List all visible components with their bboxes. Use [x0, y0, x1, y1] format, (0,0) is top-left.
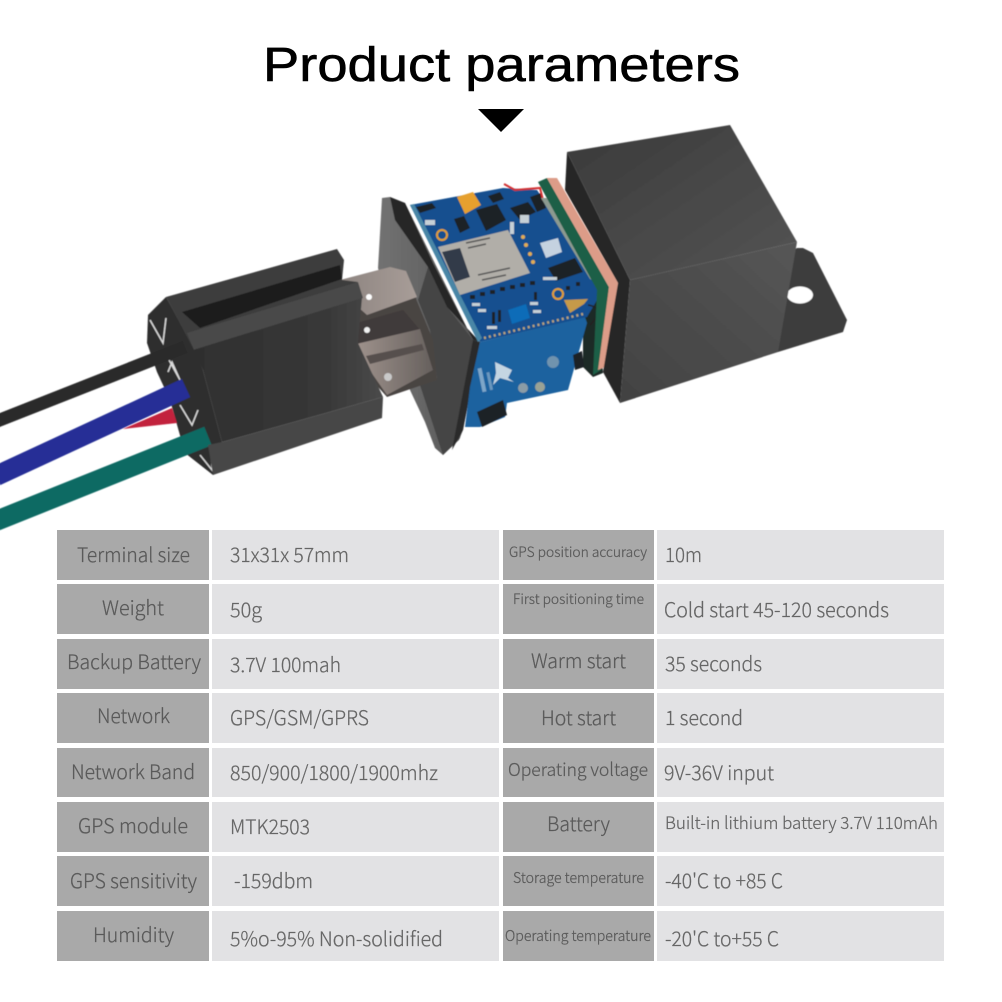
row: Warm start: 35 seconds	[665, 648, 762, 677]
row: Operating voltage: 9V-36V input	[664, 757, 774, 786]
row: Warm start	[503, 639, 944, 689]
plate shaded lower face	[418, 267, 473, 455]
connector housing back frame	[147, 297, 222, 475]
row: Hot start	[503, 693, 944, 743]
row: Network: GPS/GSM/GPRS	[230, 702, 369, 731]
row: First positioning time: First positioning time	[513, 589, 644, 609]
PCB front blue face	[465, 317, 587, 427]
row: Storage temperature: Storage temperature	[513, 867, 644, 888]
chips	[416, 192, 584, 427]
row: Backup Battery	[57, 639, 499, 689]
PCB top face	[410, 188, 603, 342]
component: orange capacitor	[457, 192, 481, 214]
row: GPS position accuracy: 10m	[665, 539, 702, 568]
row: Operating temperature	[503, 911, 944, 961]
PCB details	[425, 184, 598, 329]
solder line	[484, 314, 583, 338]
row: GPS position accuracy	[503, 530, 944, 580]
row: First positioning time: Cold start 45-120 seconds	[664, 594, 889, 623]
row: Weight: 50g	[230, 594, 262, 623]
row: Backup Battery: Backup Battery	[67, 646, 201, 675]
row: Weight	[57, 584, 499, 634]
row: GPS module: GPS module	[78, 810, 188, 839]
plate dark edge	[390, 197, 480, 342]
row: Operating temperature: -20'C to+55 C	[665, 923, 779, 952]
row: Operating voltage	[503, 748, 944, 797]
arrow: pointing down to product	[478, 109, 524, 132]
connector lower lip	[208, 397, 383, 475]
frame openings	[150, 318, 212, 470]
row: Battery	[503, 802, 944, 852]
row: GPS sensitivity: GPS sensitivity	[70, 865, 197, 894]
dark internal stack	[583, 290, 603, 377]
row: Battery: Built-in lithium battery 3.7V 110mAh	[665, 809, 938, 834]
connector front face	[193, 298, 383, 442]
row: Network Band: 850/900/1800/1900mhz	[230, 757, 438, 786]
row: Hot start: 1 second	[665, 702, 743, 731]
mounting plate	[378, 197, 480, 455]
row: GPS sensitivity: -159dbm	[234, 865, 313, 894]
title: Product parameters	[263, 39, 740, 92]
row: Warm start: Warm start	[531, 645, 626, 674]
rail slot	[182, 265, 342, 328]
relay cube left side	[565, 152, 630, 403]
row: GPS module	[57, 802, 499, 852]
row: Hot start: Hot start	[541, 702, 616, 731]
row: Backup Battery: 3.7V 100mah	[230, 649, 341, 678]
internal PCB green side	[538, 178, 609, 375]
relay cube top face	[567, 125, 797, 280]
row: Network	[57, 693, 499, 743]
row: Terminal size	[57, 530, 499, 580]
mounting ear with hole	[770, 248, 847, 352]
row: Network: Network	[97, 700, 171, 729]
row: Terminal size: Terminal size	[77, 539, 190, 568]
terminal blades	[335, 267, 437, 397]
row: Terminal size: 31x31x 57mm	[230, 539, 349, 568]
pink insulation pad	[547, 178, 618, 370]
row: GPS position accuracy: GPS position accuracy	[509, 542, 647, 562]
row: Humidity: 5%o-95% Non-solidified	[230, 923, 443, 952]
wire: black	[0, 347, 185, 422]
row: GPS sensitivity	[57, 856, 499, 906]
wire: blue	[0, 388, 186, 476]
row: Battery: Battery	[547, 808, 610, 837]
row: Storage temperature: -40'C to +85 C	[665, 865, 783, 894]
row: Operating voltage: Operating voltage	[508, 756, 648, 782]
specification table	[57, 530, 944, 961]
front face markings	[478, 356, 559, 393]
row: Weight: Weight	[102, 592, 164, 621]
row: Humidity	[57, 911, 499, 961]
wire: green	[0, 436, 208, 521]
row: Storage temperature	[503, 856, 944, 906]
internal PCB gap	[541, 198, 601, 285]
connector top rail	[166, 249, 358, 352]
relay cube front face	[620, 242, 797, 403]
row: Network Band: Network Band	[71, 756, 195, 785]
row: First positioning time	[503, 584, 944, 634]
SIM card holder	[438, 230, 530, 295]
connector ledge	[187, 282, 363, 352]
product illustration: GPS relay tracker exploded view	[0, 125, 847, 521]
row: Humidity: Humidity	[93, 919, 174, 948]
row: GPS module: MTK2503	[230, 811, 310, 840]
row: Network Band	[57, 748, 499, 797]
row: Operating temperature: Operating temperature	[505, 925, 651, 946]
wire: red	[123, 408, 177, 429]
